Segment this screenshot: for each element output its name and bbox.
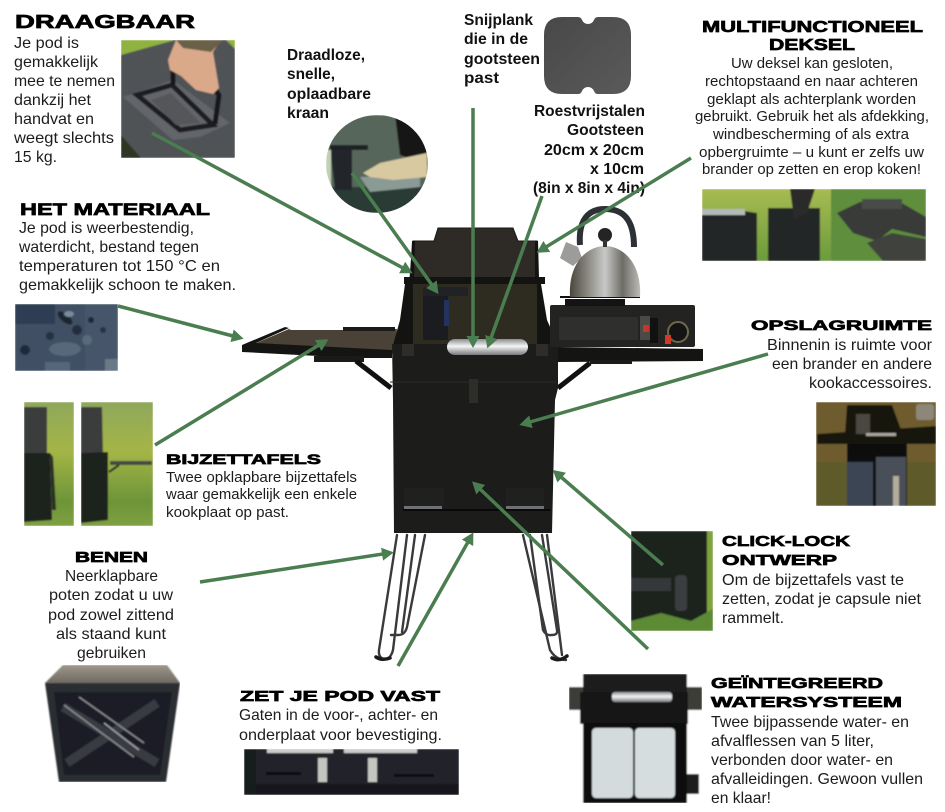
icon: cutting board — [544, 17, 631, 94]
photo: water jerrycans — [569, 674, 702, 803]
arrow: legs — [200, 554, 383, 582]
text: draagbaar description: 15 kg. — [14, 149, 57, 166]
text: deksel description — [695, 55, 929, 178]
photo: mounting holes — [244, 749, 459, 795]
gas stove — [550, 296, 695, 347]
text: click-lock description: Om de bijzettafels vast te — [722, 572, 904, 589]
text: materiaal description: waterdicht, bestand tegen — [18, 239, 199, 256]
arrow: cutting board to sink — [471, 108, 475, 337]
panel: benen — [45, 550, 180, 782]
text: deksel description: windbescherming of als extra — [712, 126, 910, 143]
text: draadloze kraan: Draadloze, — [287, 47, 365, 64]
text: deksel description: opbergruimte – u kunt er zelfs uw — [699, 144, 924, 161]
photo: storage inside pod — [816, 402, 936, 506]
text: benen description: als staand kunt — [56, 626, 167, 643]
text: draagbaar description: handvat en — [14, 111, 94, 128]
arrow: draagbaar to handle — [152, 133, 403, 268]
text: bijzettafels description: Twee opklapbare bijzettafels — [166, 469, 357, 486]
text: zet je pod vast description — [239, 707, 442, 744]
text: benen description: gebruiken — [77, 645, 146, 662]
panel: click-lock ontwerp — [631, 531, 922, 631]
text: materiaal description: gemakkelijk schoon te maken. — [19, 277, 236, 294]
arrow: storage — [530, 354, 768, 422]
arrow: tap — [352, 173, 432, 285]
heading: het materiaal: HET MATERIAAL — [20, 201, 210, 219]
text: watersysteem description: verbonden door water- en — [711, 752, 893, 769]
photos: side table folded and unfolded — [24, 402, 153, 526]
text: benen description: Neerklapbare — [65, 568, 158, 585]
heading: click-lock ontwerp: CLICK-LOCK — [722, 533, 850, 550]
photo: folded legs under pod — [44, 665, 180, 782]
text: watersysteem description: afvalflessen van 5 liter, — [711, 733, 874, 750]
photo: table folded — [24, 402, 74, 526]
text: draagbaar description: mee te nemen — [14, 73, 115, 90]
text: snijplank: gootsteen — [464, 51, 540, 68]
text: snijplank: Snijplank — [464, 12, 533, 29]
text: draagbaar description: gemakkelijk — [14, 54, 99, 71]
panel: zet je pod vast — [239, 688, 459, 795]
heading: zet je pod vast: ZET JE POD VAST — [240, 688, 440, 705]
heading: click-lock ontwerp — [722, 533, 850, 569]
lid frame — [393, 241, 558, 345]
panel: draagbaar — [13, 12, 235, 166]
sink — [447, 339, 528, 355]
text: roestvrijstalen gootsteen: x 10cm — [590, 161, 644, 178]
text: draadloze kraan — [287, 47, 371, 122]
arrow: sink — [491, 196, 542, 338]
text: draadloze kraan: oplaadbare — [287, 86, 371, 103]
text: materiaal description — [18, 220, 236, 294]
arrow: side table — [155, 345, 319, 445]
text: draadloze kraan: snelle, — [287, 66, 335, 83]
text: zet je pod vast description: Gaten in de voor-, achter- en — [239, 707, 438, 724]
text: draagbaar description: dankzij het — [14, 92, 92, 109]
text: roestvrijstalen gootsteen: (8in x 8in x 4in) — [533, 180, 645, 197]
panel: geintegreerd watersysteem — [569, 674, 923, 807]
text: draagbaar description: Je pod is — [14, 35, 79, 52]
panel: snijplank — [464, 12, 631, 94]
text: deksel description: brander op zetten en erop koken! — [702, 161, 921, 178]
text: draadloze kraan: kraan — [287, 105, 329, 122]
text: benen description: poten zodat u uw — [49, 587, 173, 604]
photo: lid positions — [702, 189, 926, 261]
heading: geintegreerd watersysteem: WATERSYSTEEM — [711, 694, 902, 711]
text: bijzettafels description — [165, 469, 357, 521]
arrow: click lock — [561, 477, 663, 565]
text: materiaal description: temperaturen tot 150 °C en — [19, 258, 220, 275]
main cabinet — [390, 344, 558, 533]
text: opslagruimte description: Binnenin is ruimte voor — [767, 337, 933, 354]
text: roestvrijstalen gootsteen — [533, 103, 645, 197]
photo: tap in use — [326, 115, 428, 213]
interior back wall — [413, 284, 537, 346]
panel: het materiaal — [15, 201, 236, 371]
heading: benen: BENEN — [75, 550, 148, 566]
lid back panel — [410, 228, 538, 278]
text: snijplank: past — [464, 70, 500, 87]
panel: opslagruimte — [751, 317, 936, 506]
tap — [423, 287, 468, 340]
left side table — [242, 327, 397, 388]
heading: draagbaar: DRAAGBAAR — [15, 12, 195, 32]
text: watersysteem description — [711, 714, 923, 807]
photo: table unfolded — [81, 402, 153, 526]
text: materiaal description: Je pod is weerbestendig, — [19, 220, 194, 237]
photo: click lock — [631, 531, 713, 631]
text: opslagruimte description: kookaccessoires. — [809, 375, 932, 392]
text: benen description: pod zowel zittend — [48, 607, 174, 624]
text: draagbaar description — [13, 35, 115, 166]
panel: multifunctioneel deksel — [695, 19, 929, 261]
text: watersysteem description: en klaar! — [711, 790, 771, 807]
heading: geintegreerd watersysteem: GEÏNTEGREERD — [711, 675, 883, 692]
panel: kraan — [287, 47, 428, 213]
text: zet je pod vast description: onderplaat voor bevestiging. — [239, 727, 442, 744]
photo: carry handle — [121, 40, 235, 158]
text: click-lock description — [722, 572, 922, 627]
panel: bijzettafels — [165, 451, 357, 521]
arrow: mounting holes — [398, 542, 468, 666]
text: snijplank: die in de — [464, 31, 528, 48]
pod legs — [376, 535, 567, 660]
text: watersysteem description: Twee bijpassende water- en — [711, 714, 909, 731]
text: roestvrijstalen gootsteen: Roestvrijstalen — [534, 103, 645, 120]
product: kitchen pod — [242, 209, 703, 660]
text: opslagruimte description: een brander en andere — [772, 356, 932, 373]
heading: geintegreerd watersysteem — [711, 675, 902, 711]
text: roestvrijstalen gootsteen: 20cm x 20cm — [544, 142, 644, 159]
text: bijzettafels description: kookplaat op past. — [166, 504, 289, 521]
text: click-lock description: rammelt. — [722, 610, 784, 627]
text: roestvrijstalen gootsteen: Gootsteen — [567, 122, 644, 139]
kettle — [560, 209, 640, 297]
text: draagbaar description: weegt slechts — [13, 130, 114, 147]
arrow: material — [118, 306, 233, 336]
text: watersysteem description: afvalleidingen. Gewoon vullen — [711, 771, 923, 788]
text: opslagruimte description — [767, 337, 933, 392]
arrows — [118, 108, 768, 666]
text: deksel description: gebruikt. Gebruik het als afdekking, — [695, 108, 929, 125]
right side table — [558, 347, 703, 388]
text: click-lock description: zetten, zodat je capsule niet — [722, 591, 922, 608]
heading: click-lock ontwerp: ONTWERP — [722, 552, 837, 569]
heading: bijzettafels: BIJZETTAFELS — [166, 451, 321, 467]
text: benen description — [48, 568, 174, 662]
text: snijplank — [464, 12, 540, 87]
text: deksel description: rechtopstaand en naar achteren — [705, 73, 918, 90]
heading: multifunctioneel deksel: MULTIFUNCTIONEEL — [702, 19, 923, 36]
heading: opslagruimte: OPSLAGRUIMTE — [751, 317, 932, 333]
arrow: water system — [480, 489, 648, 649]
arrow: lid — [546, 158, 691, 247]
text: deksel description: Uw deksel kan gesloten, — [731, 55, 893, 72]
photo: water droplets — [15, 304, 118, 371]
text: deksel description: geklapt als achterplank worden — [707, 91, 916, 108]
heading: multifunctioneel deksel: DEKSEL — [769, 37, 855, 54]
heading: multifunctioneel deksel — [702, 19, 923, 54]
text: bijzettafels description: waar gemakkelijk een enkele — [165, 486, 357, 503]
